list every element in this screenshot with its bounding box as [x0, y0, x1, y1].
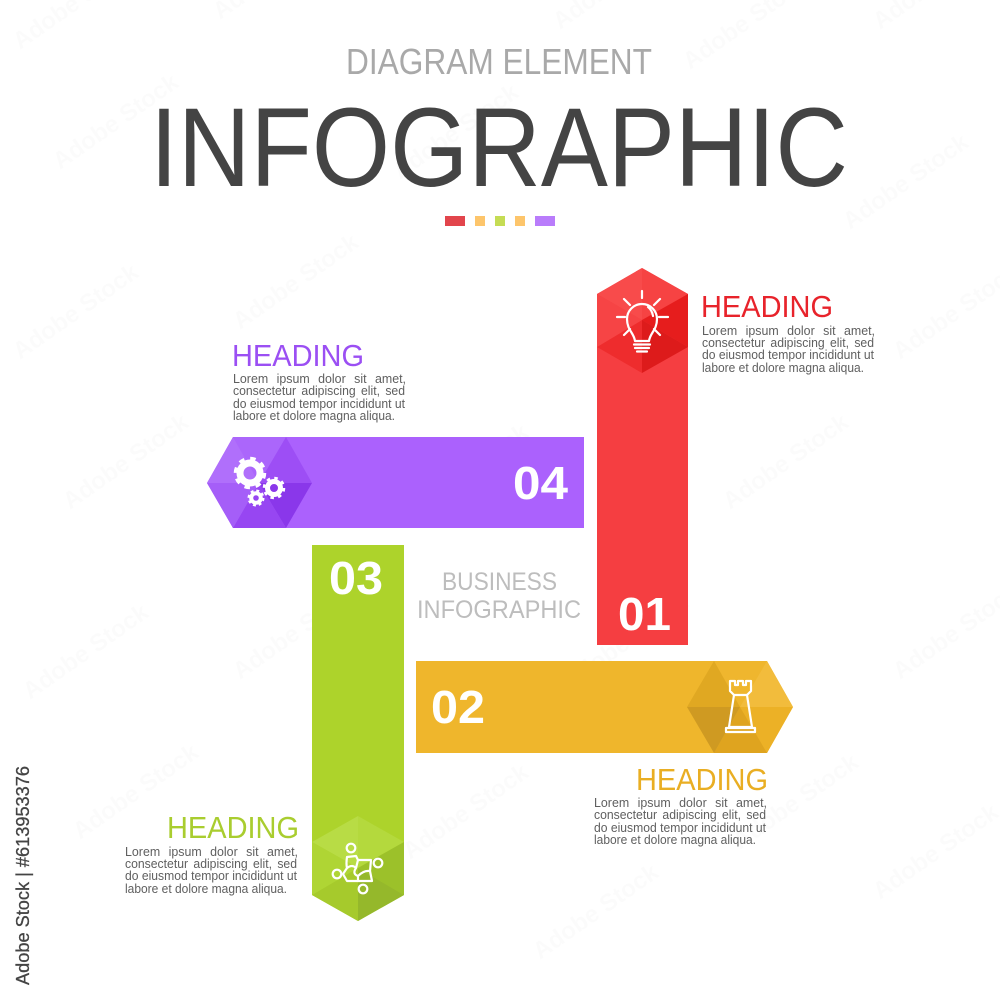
body 03: do eiusmod tempor incididunt ut: [125, 869, 298, 883]
icon: light bulb: [617, 291, 668, 352]
body 03: consectetur adipiscing elit, sed: [125, 857, 297, 871]
body 01: do eiusmod tempor incididunt ut: [702, 348, 875, 362]
body 01: labore et dolore magna aliqua.: [702, 361, 864, 375]
number 04: 04: [513, 457, 568, 509]
body 03: [125, 845, 298, 896]
centre label: business infographic: INFOGRAPHIC: [417, 596, 581, 624]
colour key strip: [445, 216, 555, 226]
text block: step 02: [594, 762, 768, 847]
centre label: business infographic: [417, 568, 581, 624]
body 04: do eiusmod tempor incididunt ut: [233, 397, 406, 411]
title: infographic: INFOGRAPHIC: [150, 85, 848, 210]
heading 03: HEADING: [167, 810, 299, 845]
body 01: Lorem ipsum dolor sit amet,: [702, 324, 875, 338]
body 01: [702, 324, 875, 375]
text block: step 03: [125, 810, 299, 896]
panel: step 01 red: [597, 268, 688, 645]
body 03: labore et dolore magna aliqua.: [125, 882, 287, 896]
icon: chess rook: [726, 681, 755, 732]
stock credit: Adobe Stock | #613953376: [13, 766, 33, 985]
body 04: labore et dolore magna aliqua.: [233, 409, 395, 423]
panel: step 03 green: [312, 545, 404, 921]
body 04: Lorem ipsum dolor sit amet,: [233, 372, 406, 386]
body 03: Lorem ipsum dolor sit amet,: [125, 845, 298, 859]
centre label: business infographic: BUSINESS: [442, 568, 557, 596]
body 04: consectetur adipiscing elit, sed: [233, 384, 405, 398]
body 04: [233, 372, 406, 423]
text block: step 01: [701, 289, 875, 375]
icon: gears: [236, 458, 284, 506]
heading 04: HEADING: [232, 338, 364, 373]
number 03: 03: [329, 552, 383, 604]
panel: step 02 yellow: [416, 661, 793, 753]
body 01: consectetur adipiscing elit, sed: [702, 336, 874, 350]
text block: step 04: [232, 338, 406, 423]
body 02: consectetur adipiscing elit, sed: [594, 808, 766, 822]
number 02: 02: [431, 681, 485, 733]
body 02: do eiusmod tempor incididunt ut: [594, 821, 767, 835]
subtitle: diagram element: DIAGRAM ELEMENT: [346, 41, 652, 82]
body 02: [594, 796, 767, 847]
number 01: 01: [618, 588, 671, 640]
body 02: labore et dolore magna aliqua.: [594, 833, 756, 847]
body 02: Lorem ipsum dolor sit amet,: [594, 796, 767, 810]
heading 02: HEADING: [636, 762, 768, 797]
icon: puzzle network: [333, 844, 382, 893]
heading 01: HEADING: [701, 289, 833, 324]
panel: step 04 purple: [207, 437, 584, 528]
